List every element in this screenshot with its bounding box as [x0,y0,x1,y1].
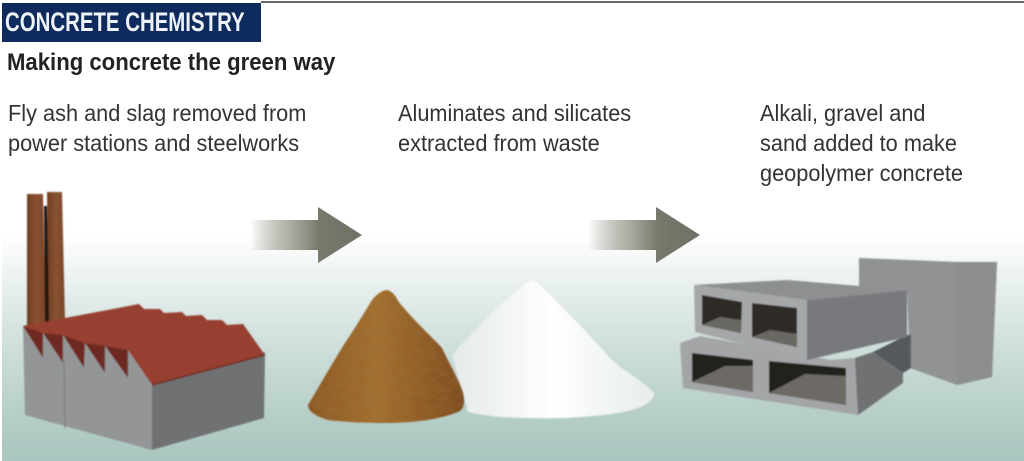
arrow 1 [250,207,362,263]
icon: concrete blocks [680,258,997,415]
text: step 2 [398,100,631,156]
text: step 2: Aluminates and silicates [398,100,631,126]
title: CONCRETE CHEMISTRY [5,7,245,37]
text: step 3: Alkali, gravel and [760,100,926,126]
text: step 1 [8,100,306,156]
text: step 3: geopolymer concrete [760,160,963,186]
icon: white pile [452,280,654,418]
subtitle: Making concrete the green way [7,49,335,76]
text: step 3: sand added to make [760,130,957,156]
text: step 2: extracted from waste [398,130,600,156]
text: step 1: power stations and steelworks [8,130,299,156]
text: step 1: Fly ash and slag removed from [8,100,306,126]
icon: factory [23,192,265,450]
arrow 2 [588,207,700,263]
icon: brown pile [308,290,464,423]
text: step 3 [760,100,963,186]
